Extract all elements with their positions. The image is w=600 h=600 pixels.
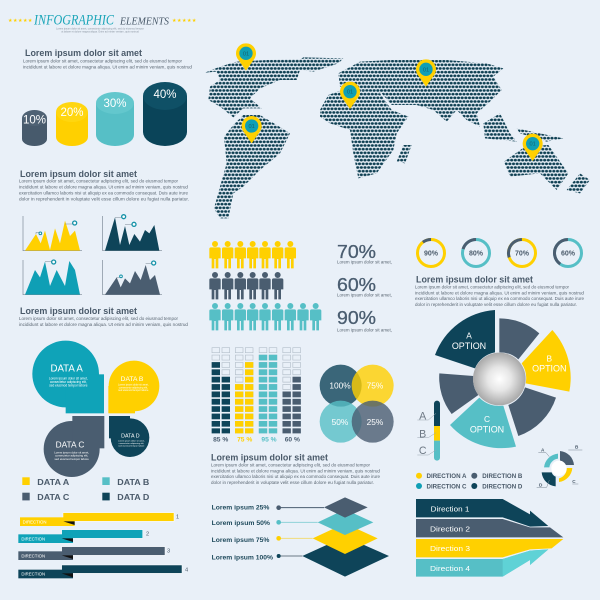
option pie chart [417, 310, 582, 488]
pie slice: B option: B [547, 353, 553, 363]
legend item: direction C: DIRECTION C [426, 484, 467, 490]
segmented bar chart [213, 347, 300, 443]
stat: 70%: Lorem ipsum dolor sit amet, [337, 260, 392, 264]
text block: center description: incididunt ut labore et dolore magna aliqua. Ut enim ad minim veniam, quis nostrud [211, 468, 380, 473]
text block: center description [211, 452, 380, 485]
people percentages [337, 242, 392, 332]
title: ★★★★★ [172, 18, 197, 24]
bar labels: 95 % [261, 436, 277, 443]
pin: south america [242, 116, 262, 143]
cylinder: 10%: 10% [23, 114, 46, 126]
cylinder chart [22, 82, 187, 146]
ring: 90%: 90% [424, 250, 439, 258]
text block: center description: Lorem ipsum dolor sit amet [211, 452, 328, 462]
petal: data D: DATA D [121, 433, 140, 439]
ribbon 1 [20, 513, 179, 526]
text block: cylinders intro: Lorem ipsum dolor sit amet [25, 48, 142, 58]
pie slice: A option: OPTION [452, 341, 486, 351]
text block: charts caption: incididunt ut labore et dolore magna aliqua. Ut enim ad minim veniam, quis nostrud [19, 322, 188, 327]
petal: data C: consectetur adipiscing elit, [55, 454, 88, 458]
ribbon 4 [18, 565, 188, 578]
ABC scale bar: B [419, 428, 426, 440]
text block: map description: Lorem ipsum dolor sit amet, consectetur adipiscing elit, sed do eiusmod tempor [19, 178, 178, 184]
pie slice: C option [450, 398, 516, 448]
text block: map description: dolor in reprehenderit in voluptate velit esse cillum dolore eu fugiat nulla pariatur. [19, 196, 189, 202]
title: ELEMENTS [119, 16, 169, 28]
layer: 100% [212, 537, 389, 577]
venn diagram [320, 365, 394, 443]
text block: charts caption: Lorem ipsum dolor sit amet, consectetur adipiscing elit, sed do eiusmod tempor [19, 316, 178, 321]
cylinder: 30% [96, 92, 134, 146]
text block: center description: exercitation ullamco laboris nisi ut aliquip ex ea commodo consequat. Duis aute irure [211, 474, 380, 479]
petal: data A: DATA A [50, 364, 83, 375]
map: dotted continents [205, 57, 590, 218]
arrow: direction 1: Direction 1 [431, 505, 469, 514]
bars: 75% [239, 362, 249, 433]
arrow: direction 2: Direction 2 [430, 525, 470, 534]
layer: 25% [212, 497, 368, 518]
pin: australia [523, 134, 543, 161]
layer: 75%: Lorem ipsum 75% [212, 538, 270, 544]
layer: 25%: Lorem ipsum 25% [212, 506, 270, 512]
ring: 60%: 60% [561, 250, 576, 258]
ring: 80% [459, 236, 493, 270]
venn circle: 50%: 50% [332, 417, 349, 427]
text block: center description: dolor in reprehenderit in voluptate velit esse cillum dolore eu fugiat nulla pariatur. [211, 480, 374, 485]
ribbon 3: DIRECTION [21, 553, 45, 558]
pie slice: B option: OPTION [532, 363, 566, 373]
center sphere [473, 353, 526, 405]
cylinder: 10% [22, 110, 47, 146]
empty cells grid [216, 347, 297, 433]
ring: 80%: 80% [469, 250, 484, 258]
ribbon 4: 4 [185, 567, 188, 573]
chart: slate [103, 260, 162, 295]
ribbon 2: 2 [146, 531, 149, 537]
area charts [23, 215, 162, 295]
bar labels: 75 % [237, 436, 252, 443]
chart: teal [23, 260, 82, 295]
venn circle: 25%: 25% [367, 417, 384, 427]
ring: 70% [505, 236, 539, 270]
text block: cylinders intro [23, 48, 192, 70]
stat: 90% [337, 308, 392, 332]
layer: 100%: Lorem ipsum 100% [212, 556, 274, 562]
text block: right description: dolor in reprehenderit in voluptate velit esse cillum dolore eu fugiat nulla pariatur. [415, 302, 577, 307]
pin: africa [340, 82, 360, 109]
title [8, 12, 197, 34]
venn circle: 100%: 100% [329, 381, 351, 391]
petal: data C: DATA C [56, 439, 84, 449]
data petal diagram [32, 341, 159, 477]
text block: center description: Lorem ipsum dolor sit amet, consectetur adipiscing elit, sed do eiusmod tempor [211, 462, 370, 468]
petal: data C [44, 416, 104, 477]
text block: cylinders intro: incididunt ut labore et dolore magna aliqua. Ut enim ad minim veniam, quis nostrud [23, 64, 192, 70]
bars: 60% [287, 377, 297, 433]
mini donut: A [541, 447, 545, 452]
title: Lorem ipsum dolor sit amet, consectetur adipiscing elit, sed do eiusmod tempor [56, 28, 144, 30]
petal: data C: sed eiusmod tempor labore [55, 457, 89, 461]
legend item: direction A: DIRECTION A [426, 474, 467, 480]
pin: north america: 01 [243, 51, 249, 57]
ribbon 1: 1 [176, 515, 179, 521]
title: INFOGRAPHIC [33, 12, 114, 28]
text block: right description: Lorem ipsum dolor sit amet, consectetur adipiscing elit, sed do eiusmod tempor [415, 284, 569, 290]
text block: charts caption: Lorem ipsum dolor sit amet [20, 306, 137, 316]
text block: right description: incididunt ut labore et dolore magna aliqua. Ut enim ad minim veniam, quis nostrud [415, 290, 584, 295]
pin: south america: 01 [249, 124, 255, 130]
petal: data D: Lorem ipsum dolor sit amet, [118, 440, 145, 443]
ribbon 4: DIRECTION [21, 572, 45, 577]
stat: 60% [337, 275, 392, 298]
bar labels [213, 436, 300, 443]
arrow: direction 4: Direction 4 [430, 564, 470, 573]
pin: asia: 01 [423, 67, 429, 73]
petal: data B [108, 361, 159, 413]
progress rings [412, 234, 587, 272]
stat: 60%: 60% [337, 275, 376, 295]
text block: map description [19, 169, 189, 202]
stat: 60%: Lorem ipsum dolor sit amet, [337, 292, 392, 298]
direction legend [416, 473, 523, 490]
world map [205, 43, 590, 218]
ABC scale bar: A [419, 411, 427, 423]
bars: 85% [216, 362, 226, 433]
pie slice: top slate [499, 318, 539, 359]
stat: 70% [337, 242, 392, 264]
mini donut: D [539, 483, 543, 488]
petal: data B: consectetur adipiscing elit, [119, 386, 148, 389]
legend item: data D: DATA D [117, 492, 149, 502]
ribbon 3 [18, 547, 170, 560]
petal: data C: Lorem ipsum dolor sit amet, [54, 450, 89, 454]
ring: 70%: 70% [515, 250, 530, 258]
chart: yellow [23, 216, 82, 251]
people pictogram [209, 241, 321, 330]
legend item: data A: DATA A [37, 477, 69, 487]
petal: data D: consectetur adipiscing elit, [119, 442, 144, 445]
people row: 60% slate [209, 272, 283, 299]
ABC scale bar [417, 401, 440, 461]
bar labels: 60 % [285, 436, 300, 443]
petal: data A [32, 341, 104, 413]
stat: 70%: 70% [337, 242, 376, 262]
cylinder: 30%: 30% [103, 98, 127, 110]
bars: 95% [263, 355, 273, 433]
pie slice: A option [435, 310, 495, 368]
petal: data D: sed eiusmod tempor labore [118, 444, 145, 447]
mini donut: C [572, 479, 576, 484]
legend item: data B: DATA B [117, 477, 149, 487]
ribbon 2: DIRECTION [21, 536, 45, 541]
legend item: direction D: DIRECTION D [482, 484, 523, 490]
bar labels: 85 % [213, 436, 228, 443]
stat: 90%: Lorem ipsum dolor sit amet, [337, 328, 392, 332]
petal: data A: sed eiusmod tempor labore [49, 384, 88, 388]
petal: data A: consectetur adipiscing elit, [50, 380, 87, 384]
ribbon 3: 3 [167, 548, 170, 554]
stat: 90%: 90% [337, 308, 376, 328]
arrow: direction 3 [416, 539, 563, 557]
venn circle: 75%: 75% [367, 381, 384, 391]
pie slice: B option [522, 330, 571, 392]
text block: map description: exercitation ullamco laboris nisi ut aliquip ex ea commodo consequat. Duis aute irure [19, 190, 188, 196]
cylinder: 20%: 20% [60, 107, 84, 119]
pie slice: C option: OPTION [470, 424, 504, 434]
pin: asia [416, 59, 436, 87]
title: ★★★★★ [8, 18, 33, 24]
arrow: direction 2 [416, 519, 563, 537]
layered diamonds [212, 497, 389, 577]
pie slice: right slate [508, 387, 556, 436]
pin: africa: 01 [347, 90, 353, 96]
people row: 70% yellow [209, 241, 296, 268]
ring: 90% [412, 234, 450, 272]
pie slice: left slate [439, 373, 478, 414]
title: ut labore et dolore magna aliqua. Enim ad minim veniam, quis nostrud [61, 30, 139, 34]
pin: australia: 01 [530, 142, 536, 148]
cylinder: 40% [143, 82, 187, 146]
petal: data D [109, 416, 149, 457]
layer: 75% [212, 523, 378, 554]
pie slice: C option: C [484, 414, 490, 424]
direction ribbons [18, 513, 188, 578]
text block: right description [415, 274, 584, 307]
petal: data B: sed eiusmod tempor labore [118, 389, 149, 392]
petal: data B: Lorem ipsum dolor sit amet, [118, 384, 149, 387]
cylinder: 20% [56, 102, 88, 146]
text block: map description: Lorem ipsum dolor sit amet [20, 169, 137, 179]
people row: 90% teal [209, 303, 321, 330]
arrow: direction 3: Direction 3 [430, 544, 470, 553]
layer: 50% [212, 509, 373, 535]
text block: cylinders intro: Lorem ipsum dolor sit amet, consectetur adipiscing elit, sed do eiusmod tempor [23, 58, 182, 64]
text block: map description: incididunt ut labore et dolore magna aliqua. Ut enim ad minim veniam, quis nostrud [19, 184, 188, 190]
petal: data B: DATA B [121, 376, 144, 383]
text block: charts caption [19, 306, 188, 327]
legend item: data C: DATA C [37, 492, 69, 502]
data legend [22, 477, 149, 502]
mini donut [537, 445, 582, 488]
ribbon 1: DIRECTION [23, 519, 46, 524]
text block: right description: Lorem ipsum dolor sit amet [416, 274, 533, 284]
cylinder: 40%: 40% [153, 89, 177, 101]
petal: data A: Lorem ipsum dolor sit amet, [49, 376, 88, 380]
ribbon 2 [18, 530, 149, 543]
mini donut: B [575, 445, 579, 450]
pie slice: A option: A [466, 331, 472, 341]
ABC scale bar: C [419, 445, 427, 457]
arrow: direction 1 [416, 499, 548, 527]
chart: dark [103, 215, 162, 251]
pin: north america [236, 43, 256, 71]
arrow: direction 4 [416, 549, 548, 577]
legend item: direction B: DIRECTION B [482, 474, 523, 480]
text block: right description: exercitation ullamco laboris nisi ut aliquip ex ea commodo consequat. Duis aute irure [415, 296, 584, 301]
ring: 60% [549, 234, 587, 272]
layer: 50%: Lorem ipsum 50% [212, 521, 271, 527]
converging direction arrows [416, 499, 563, 577]
